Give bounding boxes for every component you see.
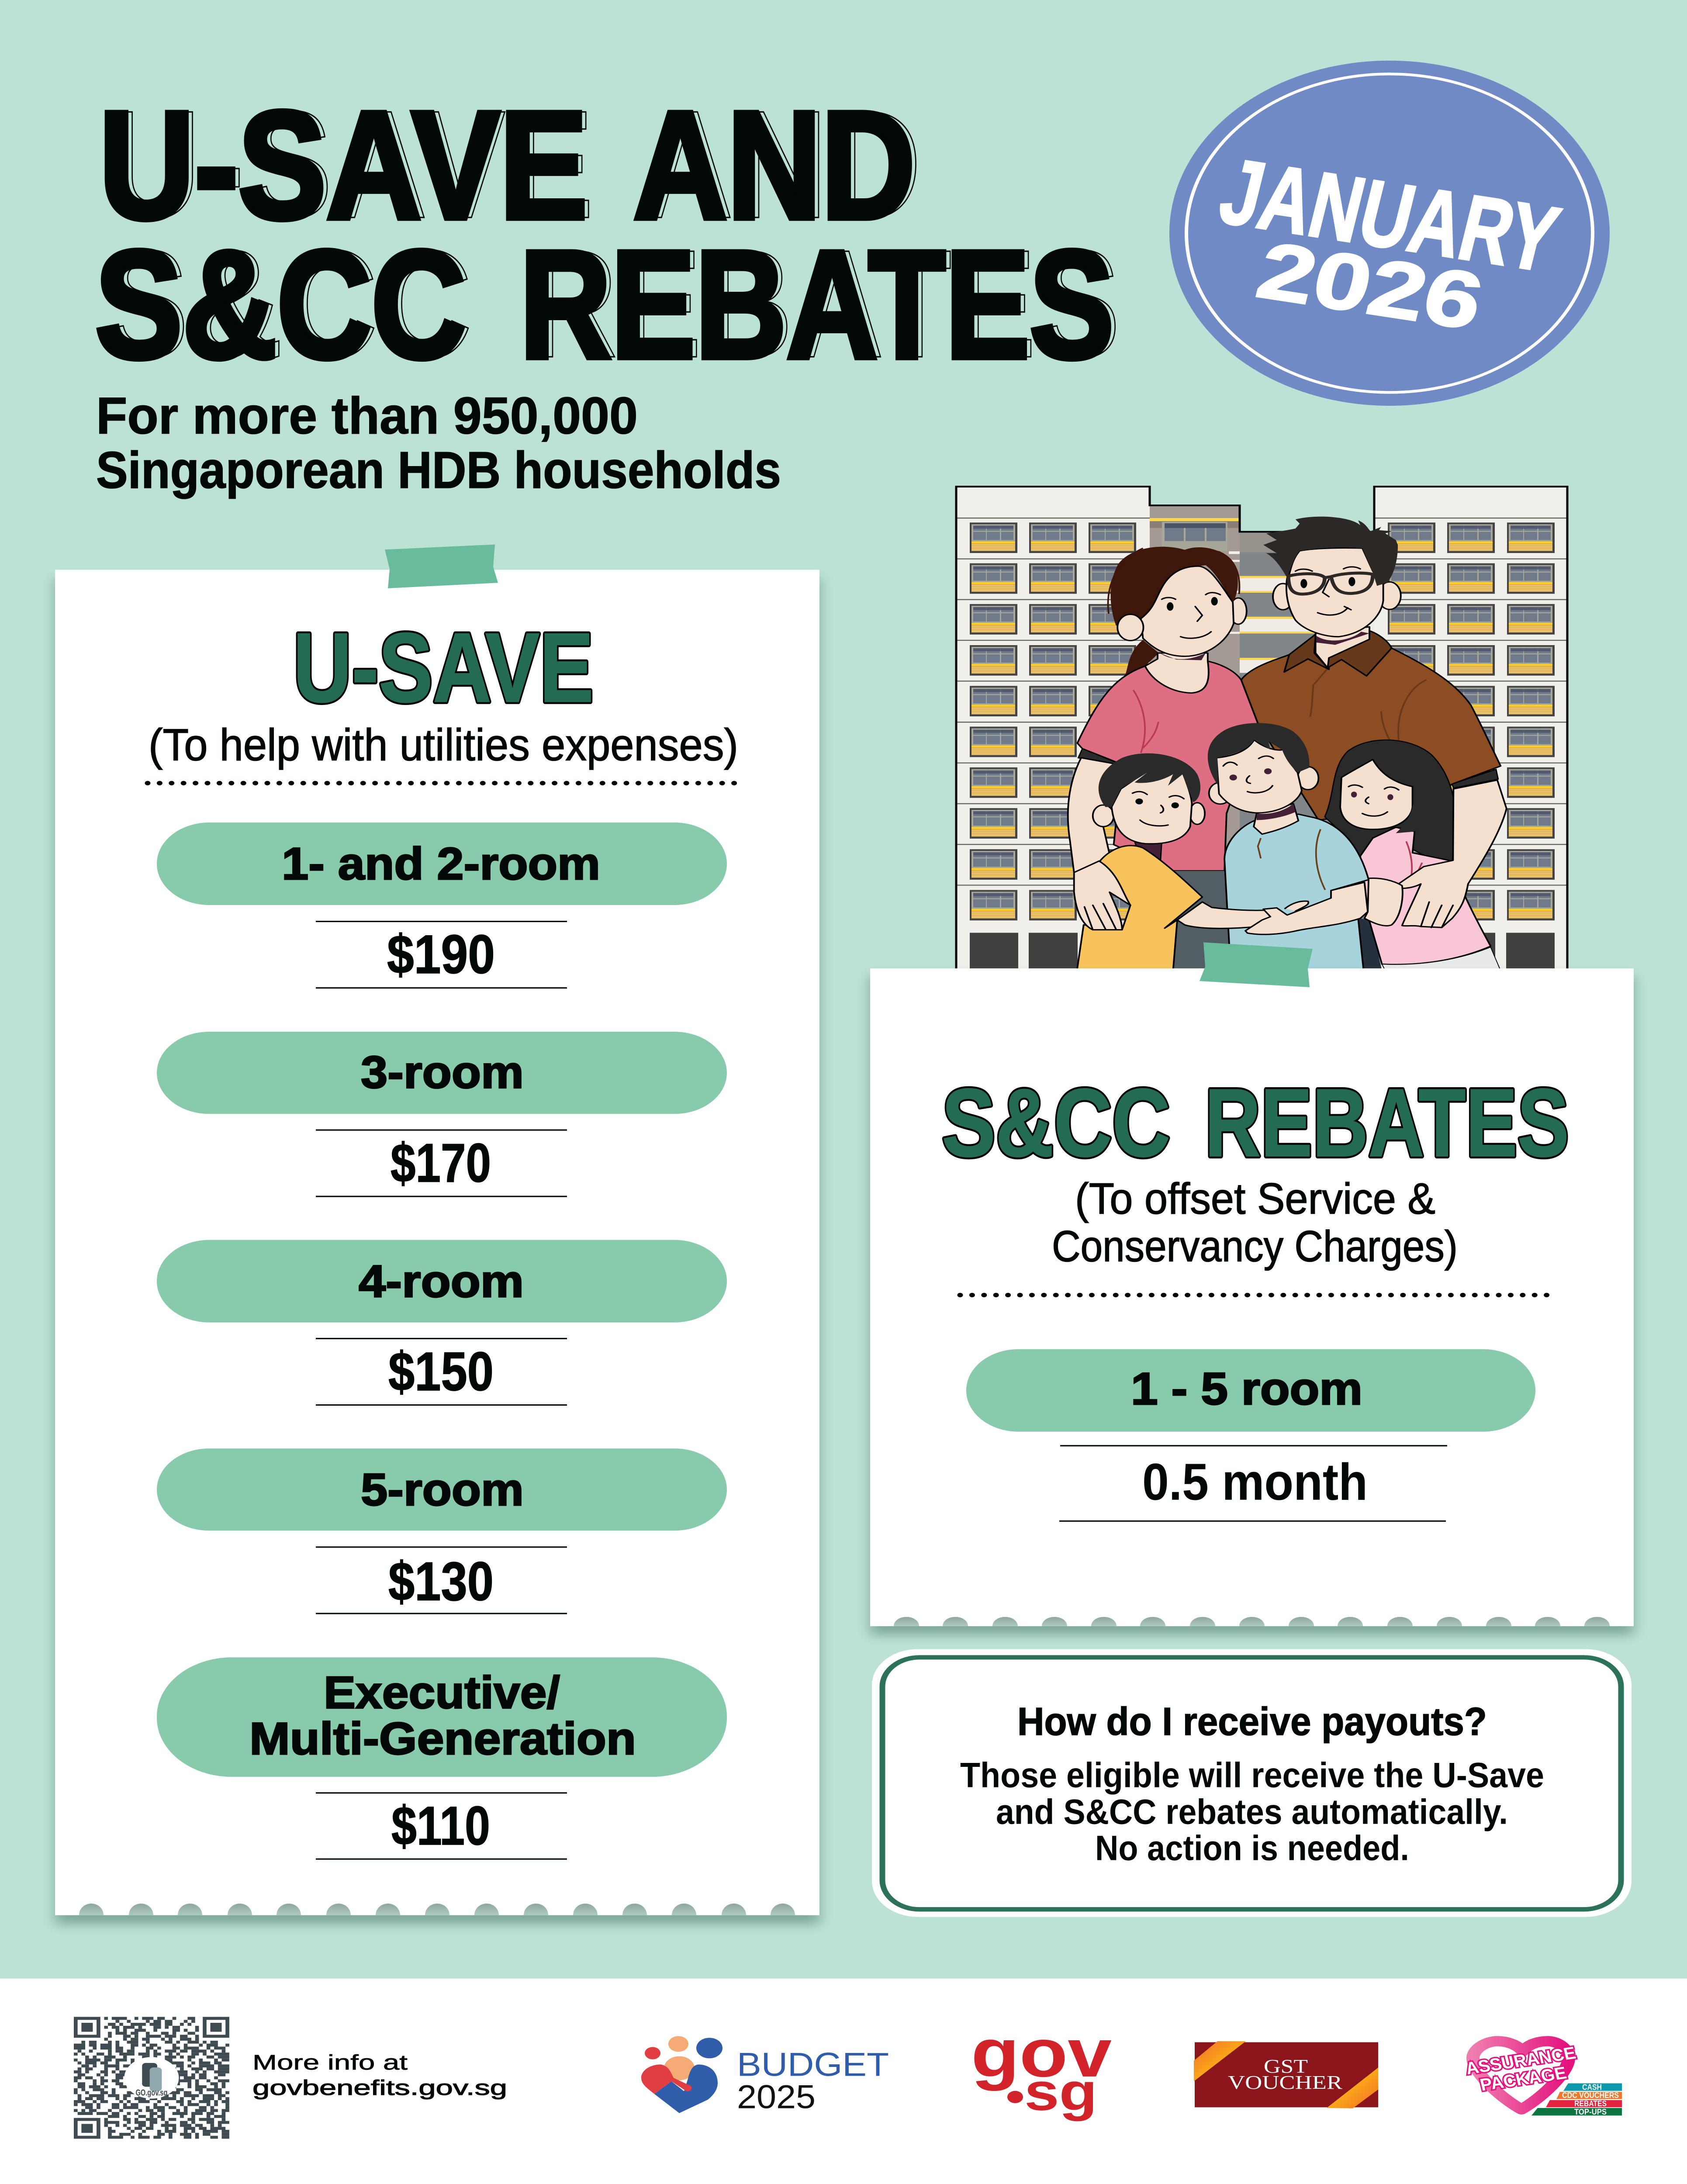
- date badge: January 2026: 2026: [1249, 225, 1491, 346]
- logo: GST Voucher: [1194, 2041, 1378, 2108]
- tape: [385, 544, 498, 588]
- title line 2: S&CC: [95, 219, 466, 390]
- row: 1 - 5 room: 1 - 5 room: [1131, 1364, 1362, 1414]
- row: 1 - 5 room: [966, 1349, 1535, 1521]
- logo: Budget 2025: BUDGET: [737, 2046, 889, 2083]
- logo: Assurance Package: TOP-UPS: [1574, 2107, 1607, 2116]
- row: 5-room: 5-room: [361, 1465, 524, 1515]
- left boy: [1077, 753, 1205, 971]
- title line 2: REBATES: [520, 219, 1114, 390]
- joined hands and arms: [1177, 882, 1368, 934]
- U-Save subheading: (To help with utilities expenses): [149, 720, 738, 770]
- row: 3-room: $170: [391, 1133, 491, 1193]
- logo: Assurance Package: [1464, 2041, 1622, 2116]
- subtitle: [96, 386, 781, 499]
- row: Executive/Multi-Generation: $110: [391, 1796, 490, 1856]
- row: 3-room: 3-room: [361, 1047, 524, 1098]
- illustration: family: [1068, 517, 1507, 971]
- row: 3-room: [157, 1032, 727, 1196]
- U-Save heading: [293, 612, 594, 722]
- S&CC subheading: [1052, 1174, 1458, 1271]
- row: 1- and 2-room: [157, 822, 727, 988]
- callout: how do I receive payouts: [872, 1649, 1632, 1917]
- S&CC heading: S&CC: [942, 1069, 1170, 1177]
- tape: [1200, 942, 1313, 987]
- more info text: More info at: [252, 2051, 408, 2074]
- row: 1 - 5 room: 0.5 month: [1142, 1452, 1368, 1511]
- U-Save heading: U-SAVE: [293, 612, 594, 722]
- centre boy: [1208, 723, 1369, 971]
- QR code: [74, 2017, 229, 2139]
- title line 2: [95, 218, 1120, 390]
- mother: [1068, 547, 1258, 971]
- QR code: GO.gov.sg: [135, 2087, 167, 2098]
- S&CC subheading: (To offset Service &: [1075, 1174, 1435, 1223]
- row: 1- and 2-room: $190: [387, 924, 495, 985]
- row: 4-room: [157, 1240, 727, 1405]
- row: 4-room: 4-room: [359, 1256, 524, 1306]
- callout: how do I receive payouts: How do I receive payouts?: [1017, 1699, 1487, 1743]
- date badge: January 2026: [1169, 61, 1610, 406]
- girl: [1325, 740, 1500, 971]
- callout: how do I receive payouts: and S&CC rebates automatically.: [996, 1792, 1508, 1832]
- panel: U-Save: [55, 544, 819, 1925]
- callout: how do I receive payouts: No action is needed.: [1095, 1828, 1409, 1868]
- S&CC heading: [942, 1069, 1569, 1177]
- more info text: [252, 2051, 507, 2100]
- row: 1- and 2-room: 1- and 2-room: [282, 839, 600, 889]
- logo: gov.sg: sg: [1024, 2062, 1097, 2122]
- logo: Assurance Package: REBATES: [1574, 2099, 1607, 2108]
- left and right towers: [956, 487, 1567, 969]
- footer: [0, 1979, 1687, 2184]
- title line 1: U-SAVE: [105, 79, 594, 250]
- perforated bottom edge: [79, 1904, 795, 1915]
- logo: Assurance Package: PACKAGE: [1478, 2063, 1569, 2094]
- logo: Budget 2025: 2025: [737, 2079, 816, 2115]
- perforated bottom edge: [894, 1617, 1610, 1626]
- row: 5-room: $130: [388, 1551, 494, 1612]
- more info text: govbenefits.gov.sg: [252, 2076, 507, 2100]
- logo: GST Voucher: VOUCHER: [1228, 2072, 1343, 2094]
- title: [95, 79, 1120, 390]
- title line 1: AND: [633, 80, 915, 251]
- logo: Assurance Package: ASSURANCE: [1464, 2043, 1578, 2078]
- title line 1: U-SAVE: [99, 80, 588, 251]
- subtitle: For more than 950,000: [96, 386, 638, 445]
- S&CC subheading: Conservancy Charges): [1052, 1222, 1458, 1271]
- row: 4-room: $150: [388, 1341, 494, 1402]
- row: Executive/Multi-Generation: Executive/: [324, 1667, 560, 1718]
- title line 1: AND: [640, 79, 921, 250]
- middle tower: [1150, 505, 1384, 969]
- illustration: HDB block: [956, 487, 1567, 969]
- row: Executive/Multi-Generation: Multi-Generation: [249, 1714, 636, 1764]
- title line 2: REBATES: [526, 218, 1120, 390]
- logo: gov.sg: gov: [971, 2015, 1112, 2091]
- logo: GST Voucher: GST: [1264, 2056, 1308, 2077]
- row: Executive/Multi-Generation: [157, 1657, 727, 1859]
- father: [1241, 517, 1500, 820]
- subtitle: Singaporean HDB households: [96, 441, 781, 499]
- parents' hands: [1074, 780, 1507, 930]
- logo: Assurance Package: CDC VOUCHERS: [1562, 2091, 1619, 2100]
- logo: Budget 2025: [641, 2036, 889, 2115]
- title line 2: S&CC: [101, 218, 472, 390]
- S&CC heading: S&CC: [942, 1069, 1170, 1177]
- panel: S&CC rebates: [870, 942, 1634, 1635]
- row: 5-room: [157, 1448, 727, 1614]
- logo: gov.sg: [971, 2015, 1112, 2122]
- U-Save heading: U-SAVE: [293, 612, 594, 722]
- logo: Assurance Package: CASH: [1582, 2082, 1602, 2092]
